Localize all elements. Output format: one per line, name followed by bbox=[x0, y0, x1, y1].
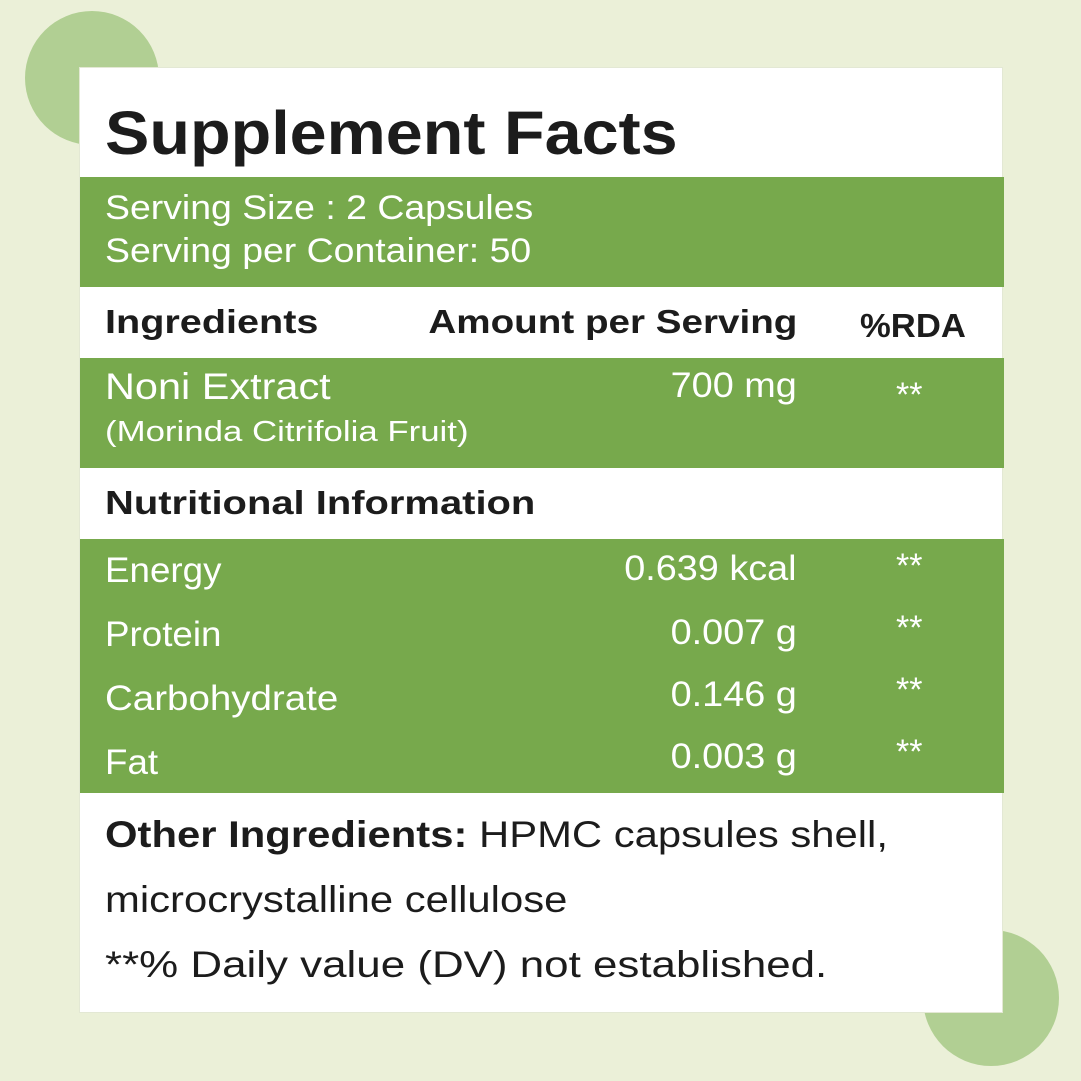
nutrition rows: ** bbox=[896, 547, 922, 585]
panel: supplement facts card bbox=[79, 67, 1003, 1013]
serving info band bbox=[80, 177, 1004, 287]
nutrition rows: 0.146 g bbox=[671, 675, 797, 714]
nutrition rows: ** bbox=[896, 733, 922, 771]
nutrition rows: ** bbox=[896, 671, 922, 709]
nutrition rows: 0.639 kcal bbox=[625, 549, 797, 588]
ingredient row: noni: 700 mg bbox=[671, 366, 797, 405]
column headers: Ingredients bbox=[105, 303, 318, 340]
other ingredients text: **% Daily value (DV) not established. bbox=[105, 944, 827, 985]
other ingredients text: Other Ingredients: HPMC capsules shell, bbox=[105, 814, 888, 855]
nutrition rows: Energy bbox=[105, 551, 221, 590]
decorative circle top-left bbox=[25, 11, 159, 145]
nutritional information heading: Nutritional Information bbox=[105, 484, 535, 521]
nutrition rows: 0.003 g bbox=[671, 737, 797, 776]
nutrition rows: Carbohydrate bbox=[105, 679, 338, 718]
title: Supplement Facts bbox=[105, 99, 678, 167]
serving info band: Serving Size : 2 Capsules bbox=[105, 189, 533, 227]
nutrition rows: Fat bbox=[105, 743, 158, 782]
column headers: %RDA bbox=[860, 307, 966, 344]
serving info band: Serving per Container: 50 bbox=[105, 232, 531, 270]
other ingredients text: microcrystalline cellulose bbox=[105, 879, 567, 920]
nutrition rows bbox=[80, 539, 1004, 793]
nutrition rows: ** bbox=[896, 609, 922, 647]
decorative circle bottom-right bbox=[923, 930, 1059, 1066]
ingredient row: noni bbox=[80, 358, 1004, 468]
nutrition rows: 0.007 g bbox=[671, 613, 797, 652]
ingredient row: noni: Noni Extract bbox=[105, 366, 331, 407]
other ingredients text bbox=[105, 814, 888, 985]
ingredient row: noni: (Morinda Citrifolia Fruit) bbox=[105, 416, 469, 448]
nutrition rows: Protein bbox=[105, 615, 221, 654]
column headers bbox=[105, 303, 966, 344]
ingredient row: noni: ** bbox=[896, 376, 922, 414]
column headers: Amount per Serving bbox=[428, 303, 797, 340]
